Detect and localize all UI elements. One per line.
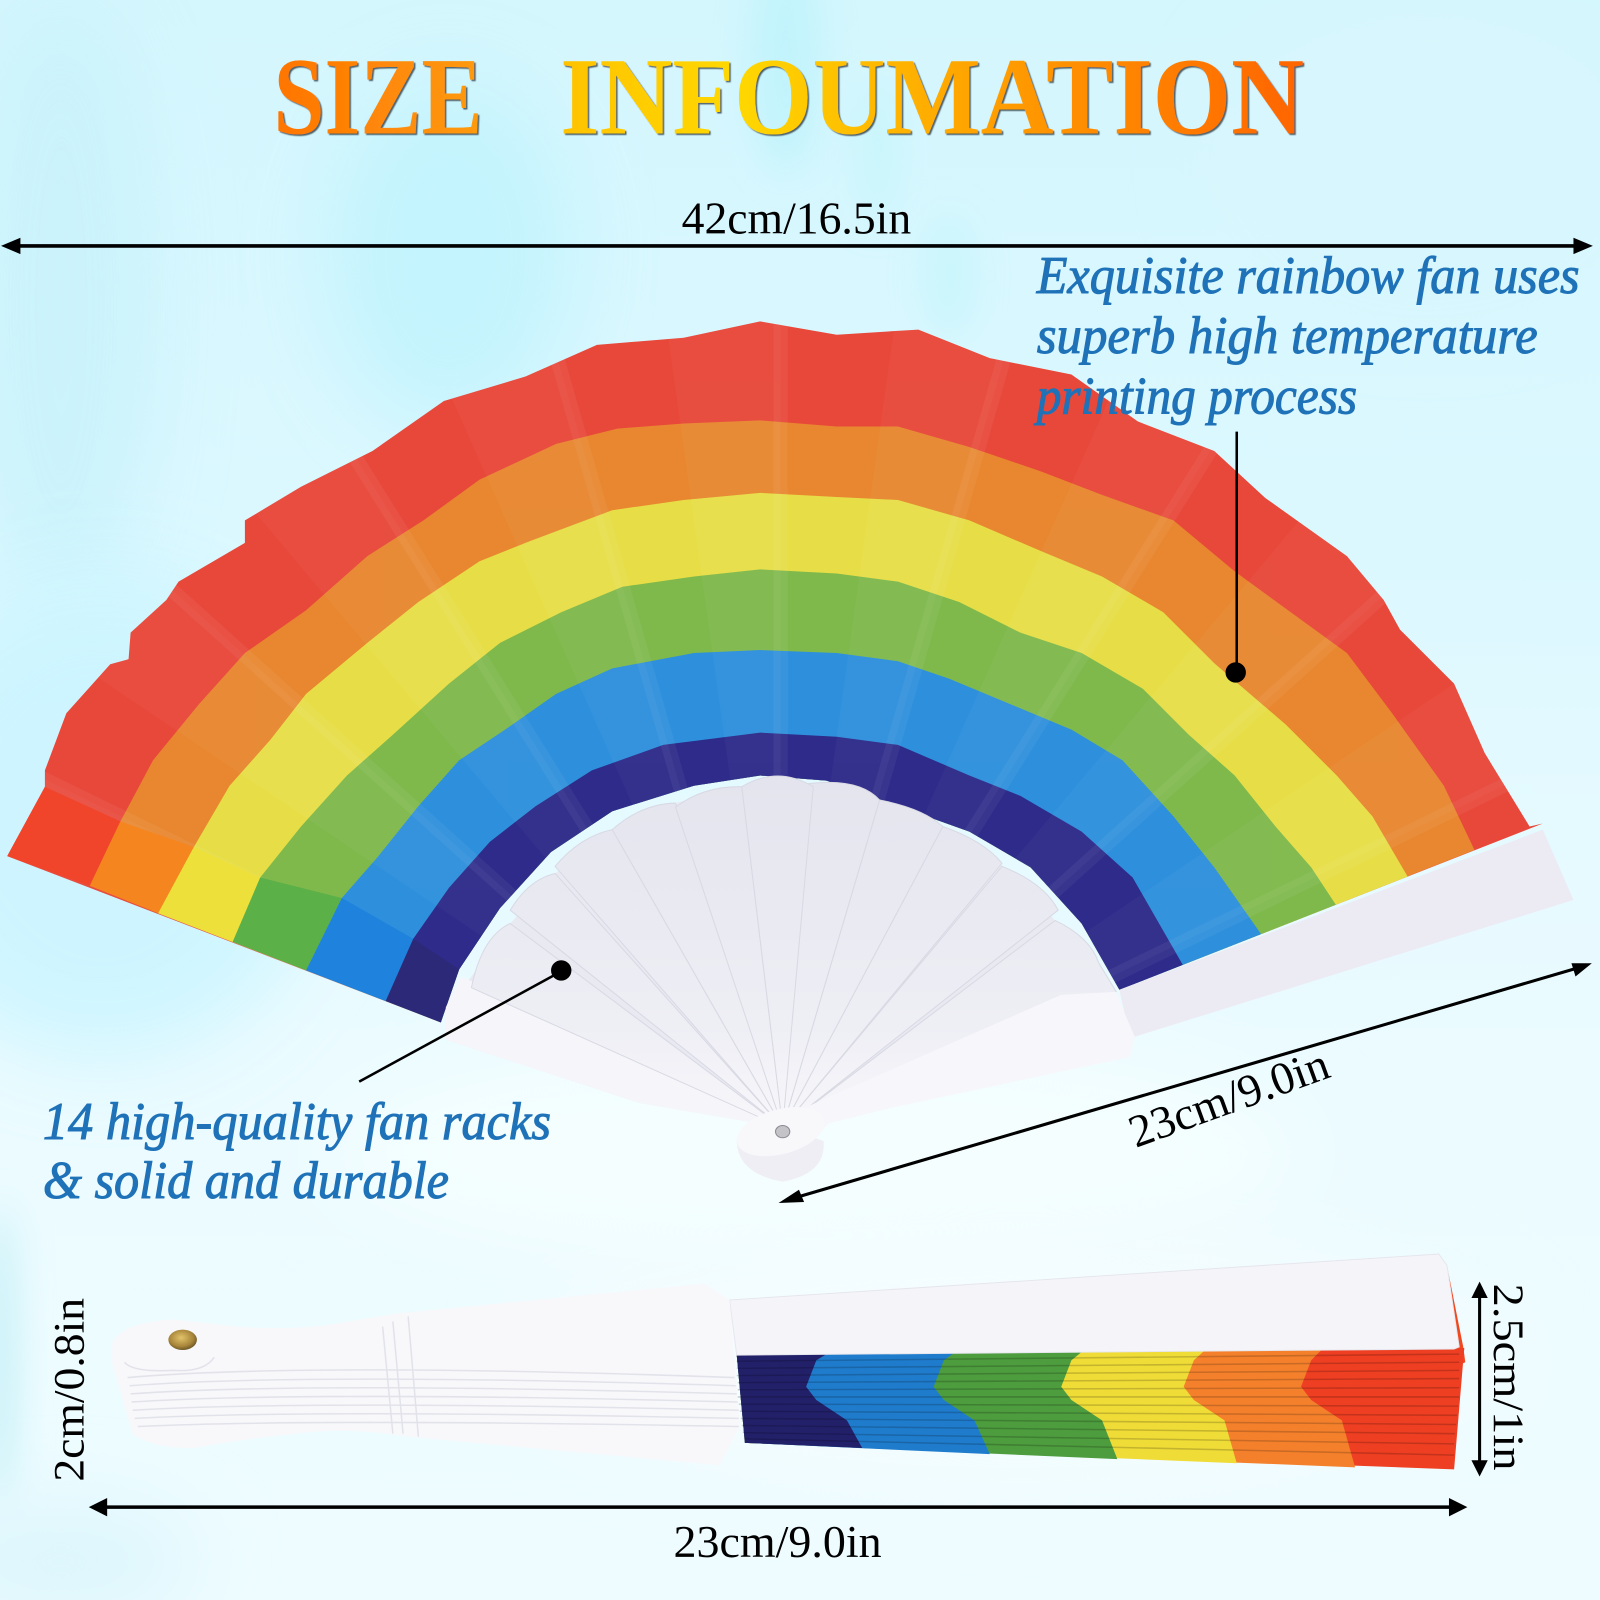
callout: printing process: printing process: [1033, 367, 1357, 425]
pivot with rivet: [731, 1098, 830, 1182]
dimension: fan width: [1, 193, 1593, 254]
fan fabric: rainbow bands: [7, 321, 1542, 1022]
callout: printing process: Exquisite rainbow fan uses: [1036, 247, 1580, 305]
callout: fan racks: & solid and durable: [43, 1152, 449, 1210]
callout: fan racks: [43, 960, 571, 1210]
closed fan handle: [112, 1284, 740, 1465]
dimension: fan width: 42cm/16.5in: [682, 193, 911, 244]
red edge behind guard: [1447, 1265, 1465, 1367]
dimension: fan radius: 23cm/9.0in: [1122, 1038, 1336, 1157]
closed fan fabric: [737, 1348, 1464, 1469]
closed rainbow fan: [112, 1254, 1465, 1469]
last saturated fold on the left: [7, 787, 459, 1022]
callout: printing process: superb high temperature: [1037, 307, 1538, 365]
dimension: closed fan thickness right: [1471, 1282, 1531, 1477]
dimension: closed fan length: [89, 1498, 1467, 1567]
hub base under ribs: [446, 787, 1116, 1128]
rivet: [168, 1330, 197, 1350]
dimension: closed fan thickness right: 2.5cm/1in: [1484, 1284, 1531, 1470]
dimension: closed fan thickness left: 2cm/0.8in: [47, 1298, 94, 1482]
callout: printing process: [1033, 247, 1580, 683]
callout: fan racks: 14 high-quality fan racks: [43, 1093, 551, 1151]
dimension: fan radius: [779, 963, 1592, 1203]
dimension: closed fan length: 23cm/9.0in: [673, 1516, 882, 1567]
title: INFOUMATION: [560, 36, 1304, 158]
title: SIZE: [273, 36, 483, 158]
open rainbow fan: [7, 321, 1574, 1182]
title: [273, 36, 1304, 158]
fabric fold shading: [45, 324, 1508, 982]
right guard stick: [783, 830, 1573, 1148]
fan ribs: white plastic hub: [446, 776, 1116, 1128]
closed fan guard stick: [730, 1254, 1459, 1355]
